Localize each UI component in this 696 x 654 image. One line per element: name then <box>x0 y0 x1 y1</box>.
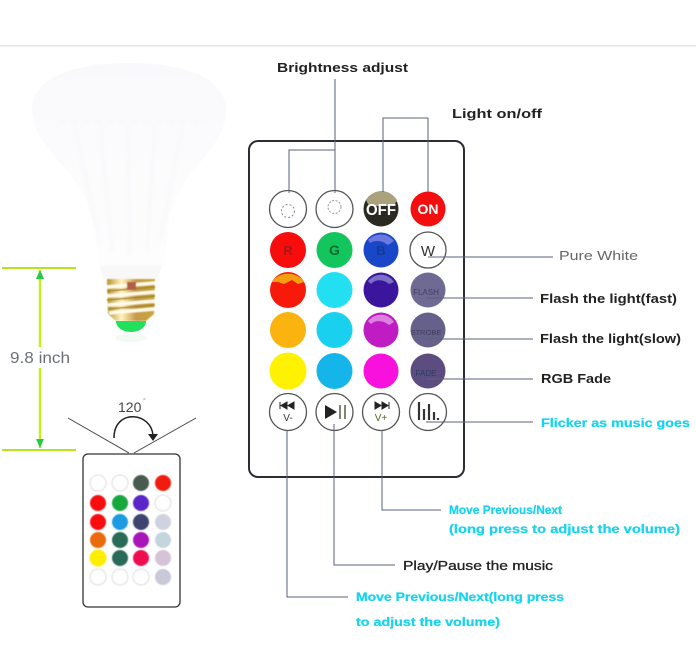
callout: move previous/next right <box>382 430 680 536</box>
callout: move previous/next left <box>287 430 564 629</box>
row 2 buttons: W <box>421 243 436 260</box>
callout: flicker as music goes: Flicker as music goes <box>541 418 690 430</box>
row 1 buttons: OFF <box>366 202 396 219</box>
small remote <box>83 454 180 607</box>
bulb green tip <box>116 321 146 332</box>
row 4 buttons <box>270 312 446 348</box>
row 5 buttons <box>270 352 446 390</box>
large remote <box>249 141 464 477</box>
row 6 buttons <box>270 394 446 430</box>
row 6 buttons: V+ <box>375 413 387 424</box>
dimension label: 9.8 inch <box>10 350 70 367</box>
callout: rgb fade: RGB Fade <box>541 371 611 386</box>
callout: light on/off: Light on/off <box>452 106 543 121</box>
dimension: 9.8 inch <box>2 268 76 450</box>
remote outline <box>249 141 464 477</box>
callout: brightness adjust: Brightness adjust <box>277 60 409 75</box>
bulb screw base <box>107 279 155 321</box>
row 3 buttons: FLASH <box>413 288 439 297</box>
callout: move previous/next left: to adjust the volume) <box>356 617 500 629</box>
row 2 buttons: G <box>329 242 340 258</box>
bulb collar <box>100 266 162 279</box>
callout: flash fast: Flash the light(fast) <box>540 291 677 306</box>
angle label: 120 <box>118 399 142 415</box>
callout: play/pause: Play/Pause the music <box>403 558 554 573</box>
bulb body <box>32 63 226 266</box>
row 2 buttons: B <box>376 243 386 258</box>
angle diagram: 120 degrees <box>68 397 196 453</box>
row 3 buttons <box>270 272 446 308</box>
callout: brightness adjust <box>277 60 409 193</box>
callout: play/pause <box>334 424 554 573</box>
row 4 buttons: STROBE <box>411 328 441 337</box>
callout: move previous/next left: Move Previous/Next(long press <box>356 592 564 604</box>
icon: light bulb <box>32 63 226 342</box>
callout: pure white: Pure White <box>559 248 638 263</box>
row 1 buttons: ON <box>418 201 438 217</box>
row 5 buttons: FADE <box>416 369 436 378</box>
angle diagram: 120 degrees: ° <box>143 397 146 405</box>
callout: light on/off <box>383 106 543 192</box>
callout: move previous/next right: (long press to adjust the volume) <box>449 524 680 536</box>
row 2 buttons: R <box>283 243 293 258</box>
callout: flash slow: Flash the light(slow) <box>540 331 681 346</box>
callout: move previous/next right: Move Previous/Next <box>449 505 562 517</box>
row 1 buttons <box>270 190 446 228</box>
row 6 buttons: V- <box>283 413 293 424</box>
row 2 buttons <box>270 232 446 268</box>
top divider <box>0 45 696 46</box>
